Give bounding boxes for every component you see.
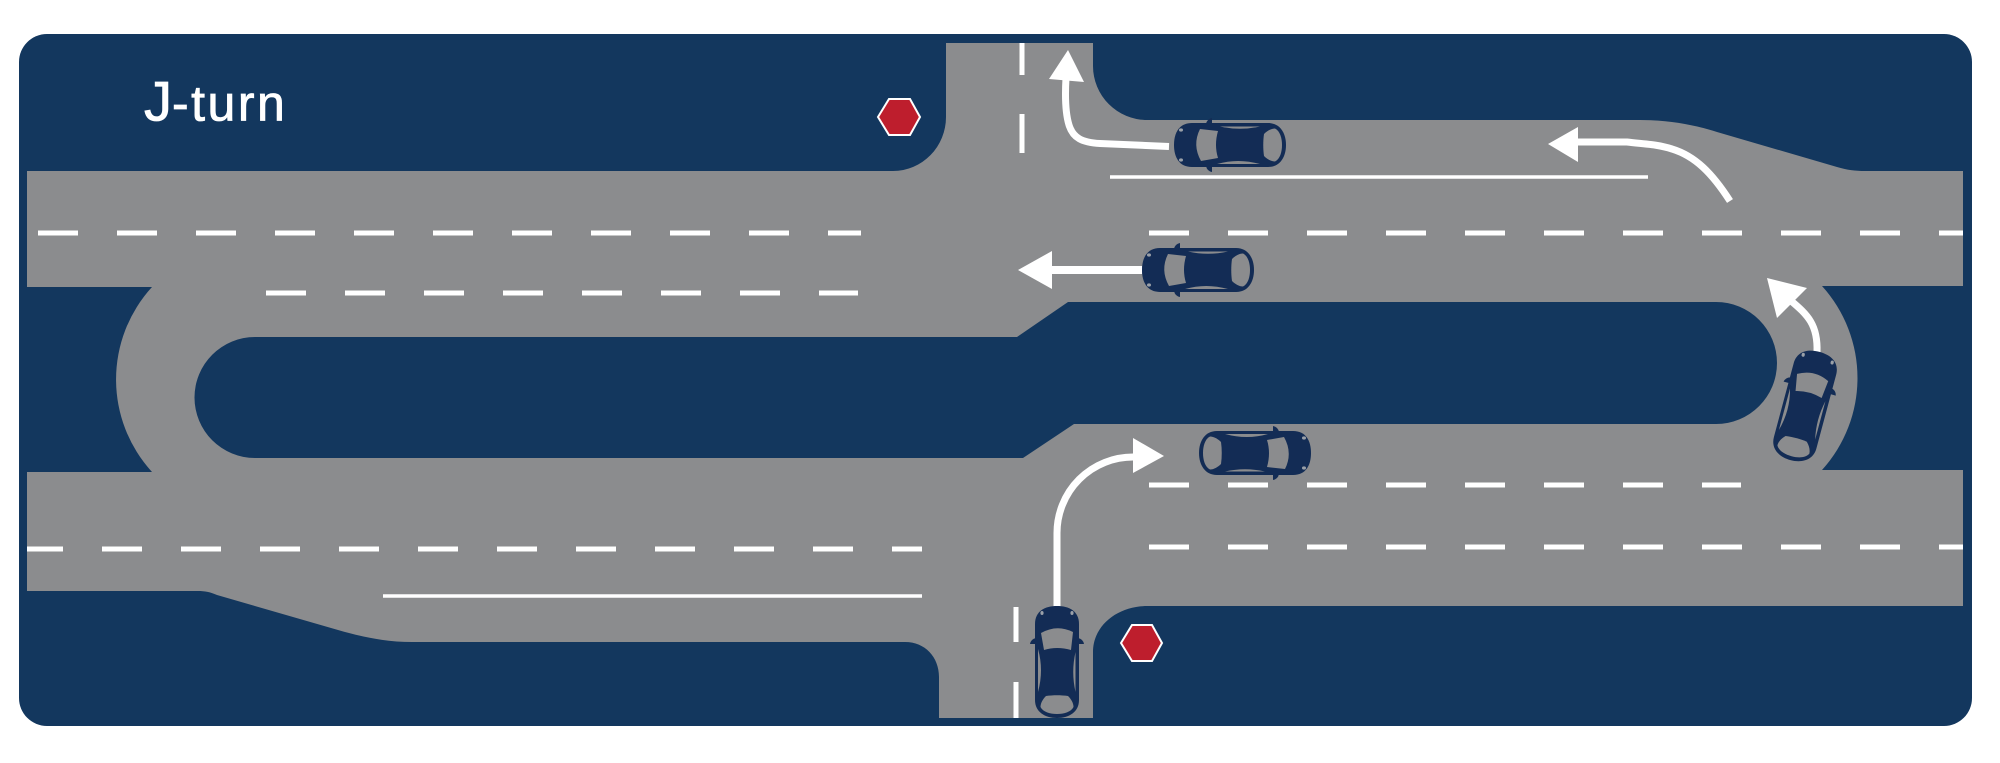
car: bottom side road <box>1030 606 1084 718</box>
arrow: straight left <box>1018 251 1142 289</box>
car: top lane turning <box>1174 118 1286 172</box>
car: right-bound lane <box>1199 426 1311 480</box>
arrow: bottom turn right <box>1057 438 1164 607</box>
car: left through lane <box>1142 243 1254 297</box>
title: J-turn <box>144 70 287 132</box>
icon: stop sign bottom <box>1121 625 1162 661</box>
car: U-turn <box>1764 345 1846 467</box>
icon: stop sign top <box>878 99 920 135</box>
arrow: top right curve <box>1548 127 1730 201</box>
arrow: U-turn curve at right <box>1767 278 1817 352</box>
arrow: turn left-up to top side road <box>1049 50 1169 146</box>
